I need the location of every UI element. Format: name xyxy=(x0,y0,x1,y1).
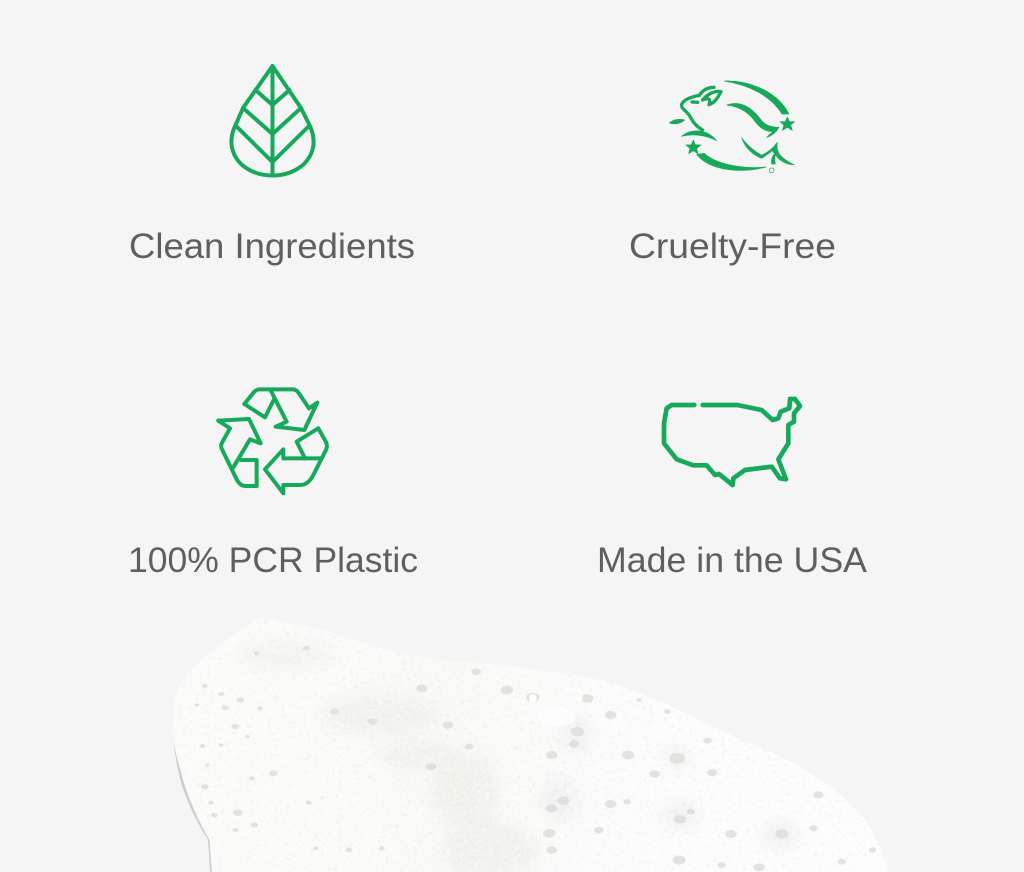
heading: Cruelty-Free: Cruelty-Free xyxy=(629,227,836,266)
heading: Made in the USA: Made in the USA xyxy=(597,541,868,580)
heading: 100% PCR Plastic: 100% PCR Plastic xyxy=(128,541,418,580)
foam swatch xyxy=(173,644,888,872)
heading: Clean Ingredients: Clean Ingredients xyxy=(129,227,415,266)
icon: leaf drop xyxy=(231,66,314,176)
icon: recycling arrows xyxy=(218,389,327,493)
icon: USA outline xyxy=(664,399,800,485)
icon: leaping rabbit xyxy=(669,81,795,173)
